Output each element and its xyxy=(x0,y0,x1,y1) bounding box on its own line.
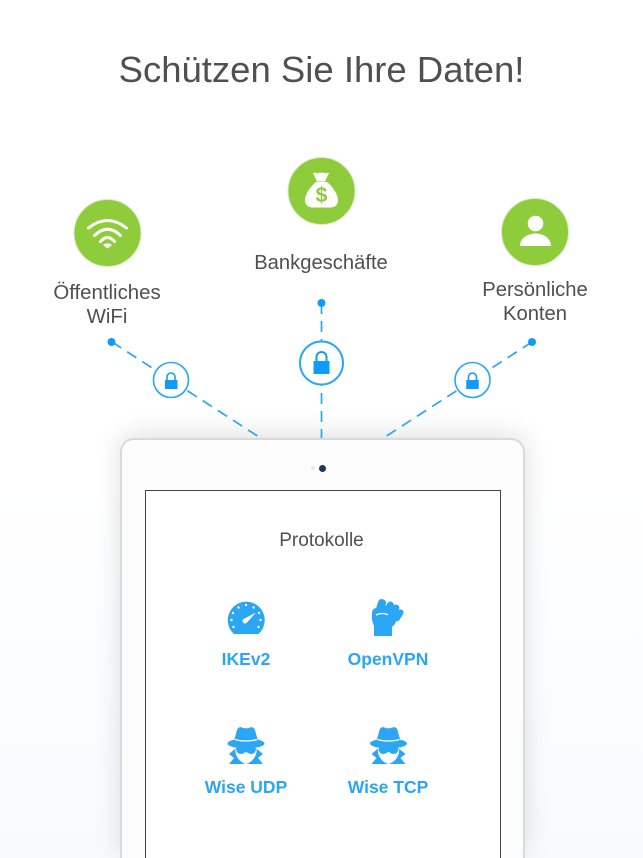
right connection line xyxy=(385,338,536,437)
label: Bankgeschäfte: Bankgeschäfte xyxy=(254,252,388,274)
center connection line xyxy=(318,299,326,438)
label: Öffentliches WiFi: WiFi xyxy=(87,306,127,328)
icon: money bag xyxy=(288,158,355,224)
title: Schützen Sie Ihre Daten! xyxy=(119,49,524,90)
left connection line xyxy=(108,338,259,437)
icon: speedometer xyxy=(228,602,265,634)
label: Wise UDP: Wise UDP xyxy=(205,777,287,797)
label: IKEv2: IKEv2 xyxy=(222,649,270,669)
tablet device xyxy=(120,438,525,858)
icon: right lock xyxy=(455,362,490,398)
icon: fist xyxy=(372,598,405,636)
label: Protokolle: Protokolle xyxy=(279,530,364,551)
icon: person xyxy=(502,198,568,266)
icon: spy right xyxy=(370,727,407,764)
label: Persönliche Konten xyxy=(482,279,588,325)
front camera xyxy=(319,465,326,472)
front sensor xyxy=(311,466,315,470)
label: Öffentliches WiFi: Öffentliches xyxy=(53,282,161,304)
label: Öffentliches WiFi xyxy=(53,282,161,328)
icon: center lock xyxy=(300,342,343,384)
tablet screen xyxy=(145,490,501,858)
icon: wifi xyxy=(74,200,141,266)
label: Wise TCP: Wise TCP xyxy=(348,777,428,797)
label: Persönliche Konten: Konten xyxy=(503,303,567,325)
icon: left lock xyxy=(154,362,188,398)
label: OpenVPN: OpenVPN xyxy=(348,649,428,669)
icon: money bag: $ xyxy=(316,184,328,207)
label: Persönliche Konten: Persönliche xyxy=(482,279,588,301)
icon: spy left xyxy=(228,727,264,764)
